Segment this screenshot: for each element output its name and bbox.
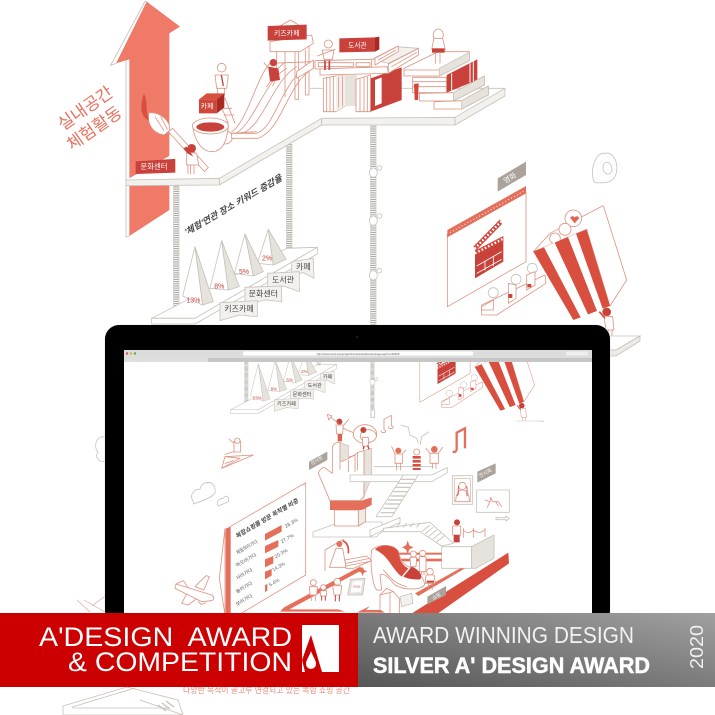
tower with kids cafe label [268,20,313,99]
chart scene [175,438,306,623]
values [268,517,300,588]
left overflow illustrations behind laptop [77,437,105,612]
chart title: 복합쇼핑몰 방문 목적별 비중 [235,496,300,540]
pyramid: kids cafe 13% [183,247,213,305]
mannequins and clothes rack [325,539,372,571]
label: library [339,37,379,52]
figure: child holding brush [183,144,199,174]
rope: middle support [287,144,292,252]
exhibition box [442,535,494,568]
browser chrome: http://www.incruit.com/project/Contents/skdtourism/page.asp?no=82508 [317,352,400,356]
bars [265,525,282,592]
pyramid: culture center 8% [210,241,239,290]
library building [315,46,418,112]
tag: kids cafe: 키즈카페 [224,303,254,313]
icon: paint brush with flame [141,93,208,171]
rope: long right rope with knots [369,113,386,330]
tag: cafe: 카페 [296,262,311,272]
icon: big rising arrow [111,1,180,237]
slide [232,62,313,138]
tag: cafe [292,258,314,278]
row labels: 사러가다 [234,566,254,582]
row labels: 보러가다 [234,592,254,608]
icon: coffee cup [192,118,232,152]
singers platform with stairs [350,468,447,517]
figure: child reading [317,40,335,70]
laptop frame [104,324,610,625]
small platform under figure [590,336,640,356]
upper illustration: indoor activity scene [54,1,640,356]
icon: popcorn box [533,206,627,320]
hand scene [300,410,433,530]
tower with kids cafe label: 키즈카페 [274,29,300,38]
dog frame [477,490,509,512]
label: movie: 영화 [502,171,518,185]
pyramid: kids cafe 13%: 13% [186,298,200,305]
paper plane with child [222,438,253,468]
audience row [482,263,546,315]
heading: indoor activities [54,83,126,154]
sale card: SALE [353,584,360,588]
arrow: next [496,516,509,521]
heading: indoor activities: 체험활동 [63,103,126,154]
icon: gray flying popcorn [592,153,617,183]
banner: silver award [355,613,715,687]
stairs to exhibition [370,518,453,546]
row labels: 체험하러가다 [235,538,259,556]
squiggle: sound [401,425,429,445]
stairs below banner [63,687,183,715]
singers [392,446,443,470]
stacked books [404,52,488,109]
right scene on laptop screen [350,425,509,617]
figures near shoe [410,550,435,589]
icon: airplane [175,576,214,605]
icon: giant hand [318,442,372,526]
values: 5.4% [268,577,281,588]
shelf [152,247,317,324]
year: 2020 [687,625,707,669]
pyramid: culture center 8%: 8% [214,283,224,290]
icon: small dotted element [371,410,375,417]
award name text: A'DESIGN AWARD [39,622,292,652]
label: library: 도서관 [348,41,367,50]
platform: upper floor [126,88,505,186]
label: shopping [427,586,446,604]
tag: library: 도서관 [272,275,295,285]
label: shopping: 쇼핑 [431,591,442,602]
tag: library [268,272,299,292]
browser chrome [124,350,592,362]
values: 27.7% [280,533,296,545]
bottom overflow: caption and stair illustration [63,685,350,715]
red floor base [407,553,509,617]
label: cafe box: 카페 [201,101,213,110]
row labels [234,538,259,608]
text: keyword rate chart title: '체험'연관 장소 키워드 증감율 [184,171,283,238]
movie screen [447,186,526,307]
award name text [39,622,292,677]
icon: sparkle [402,541,413,554]
shop floor scene [280,539,385,613]
shopping bags [380,588,413,615]
figure: child on slide [264,59,284,87]
library and books scene [315,29,488,112]
panel: survey bar chart [219,483,306,623]
heading: indoor activities: 실내공간 [54,83,117,134]
floor strips [280,567,385,613]
miniature of upper illustration on laptop screen [230,362,544,422]
chart: pyramid chart on shelf [152,229,317,324]
pyramid: library 5% [234,234,263,276]
clouds [192,482,229,506]
pyramid: cafe 2%: 2% [262,256,272,263]
rope: left support [174,186,179,315]
figure: person on ladder [215,63,235,123]
figure: person holding popcorn [599,308,614,342]
keyword chart group [152,171,317,324]
label: exhibition: 전시회 [478,467,493,479]
values: 14.3% [271,561,287,573]
label: exhibition [477,463,496,483]
icon: big high heel shoe [371,545,424,590]
figure: girl on books [432,29,445,63]
label: movie [498,162,526,192]
values: 28.3% [284,517,300,530]
award winning text: AWARD WINNING DESIGN [373,622,634,648]
pyramid: cafe 2% [257,229,286,265]
tag: culture center: 문화센터 [249,289,278,299]
label: culture center [136,159,175,174]
tag: culture center [245,286,282,305]
label: exhibition: 전시회 [309,454,324,467]
label: culture center: 문화센터 [141,162,167,171]
figure: visitor [453,519,461,542]
banner: A' Design Award and Competition [0,613,358,687]
award name text: & COMPETITION [68,647,292,677]
movie and popcorn scene [447,153,627,342]
row labels: 먹으러가다 [234,551,258,569]
figure: guitar player [343,425,377,449]
tag: kids cafe [220,301,257,321]
silver award text: SILVER A' DESIGN AWARD [373,653,650,678]
row labels: 놀러가다 [234,580,254,595]
shoppers [309,578,342,601]
caption text: 다양한 목적이 골고루 연결되고 있는 복합 쇼핑 공간 [183,685,350,695]
platform under hand [313,522,382,537]
salmon strips [398,553,465,596]
icon: small music note [381,415,393,433]
values: 20.3% [274,548,289,560]
figure: trumpet player [327,414,349,441]
stanchions [463,528,485,537]
icon: small sparkle [358,567,367,576]
label: cafe box [199,93,224,113]
icon: big music note [453,428,465,452]
portrait frame [452,476,473,504]
pyramid: library 5%: 5% [239,269,249,276]
lower wall line and platform [300,467,433,530]
icon: clapperboard [473,219,503,278]
icon: award logo [302,625,339,672]
